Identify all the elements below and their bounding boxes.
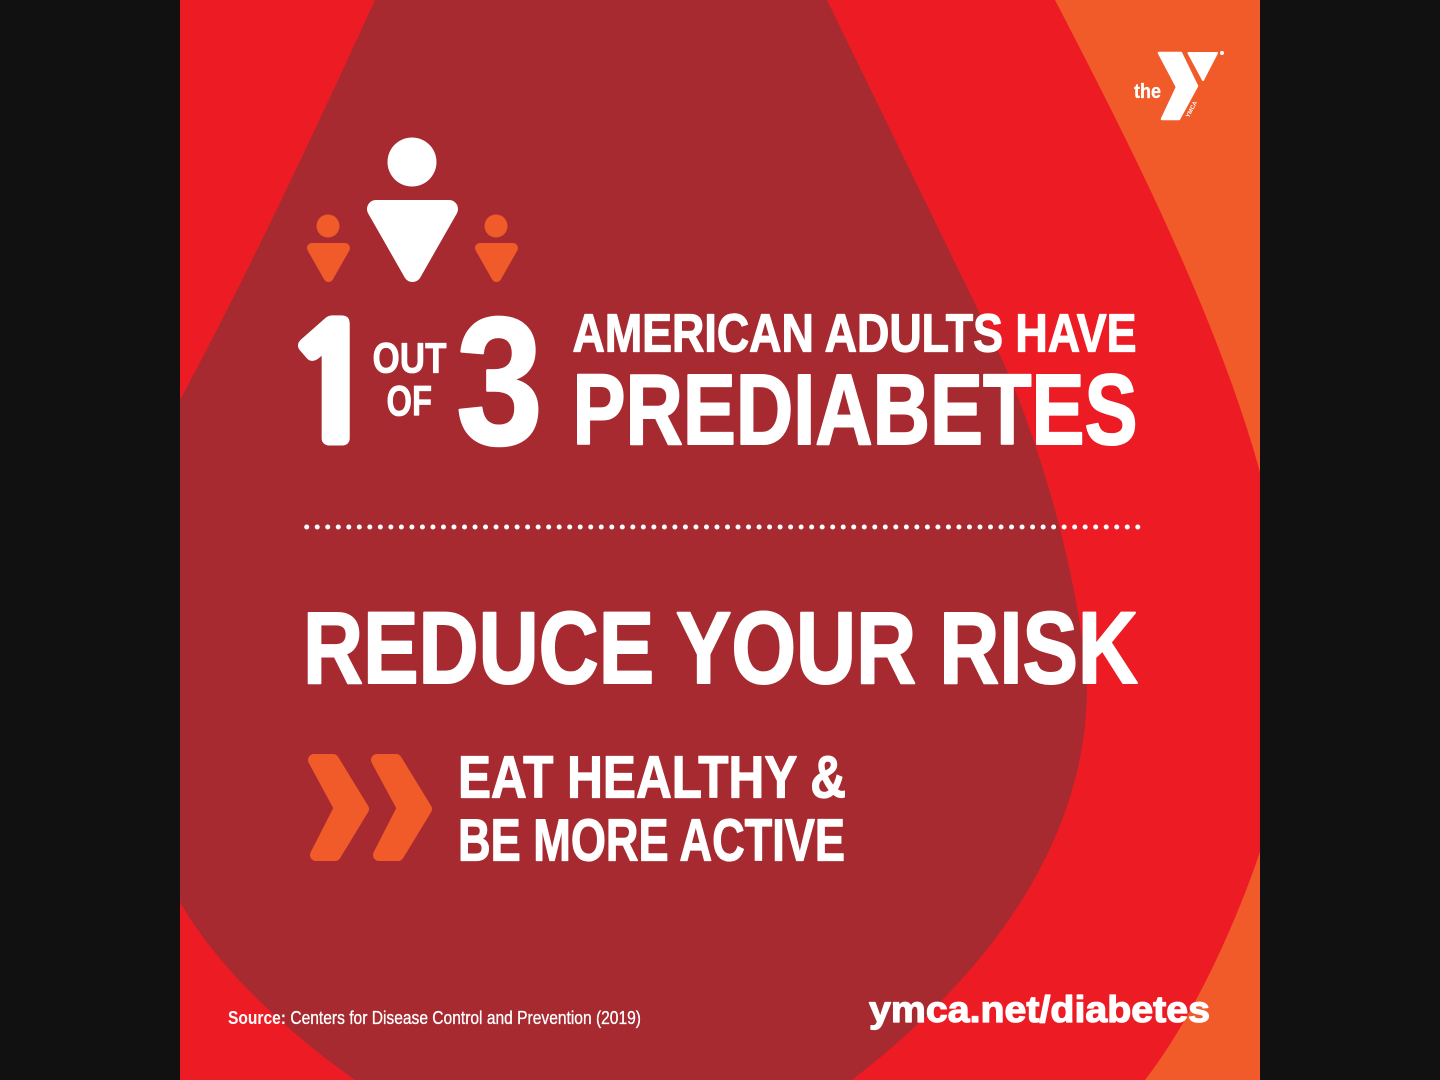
text line: eat healthy: EAT HEALTHY & [458, 744, 846, 810]
shape: dark red blood drop [180, 0, 1087, 1080]
logo mark: Y left arm and stem [1159, 53, 1197, 119]
icon: left orange person [312, 214, 345, 277]
text line: American adults have: AMERICAN ADULTS HAVE [572, 304, 1136, 363]
website url: ymca.net/diabetes [869, 989, 1210, 1030]
text line: prediabetes: PREDIABETES [572, 354, 1138, 466]
icon: double chevron arrow [314, 760, 426, 855]
heading: American adults have prediabetes [572, 304, 1138, 466]
logo mark: registered dot [1220, 51, 1224, 55]
numeral: 1: 1 [282, 307, 382, 464]
icon: first chevron [314, 760, 363, 855]
icon: one out of three people [312, 138, 513, 277]
shape: top right orange curve [1055, 0, 1260, 472]
logo word: the: the [1134, 81, 1161, 103]
label: out: OUT [372, 336, 447, 383]
panel: red square [180, 0, 1260, 1080]
logo small text: YMCA: YMCA [1185, 100, 1199, 119]
icon: second chevron [377, 760, 426, 855]
logo mark: Y right arm [1188, 53, 1217, 80]
icon: centre white person [376, 138, 449, 273]
text block: eat healthy and be more active [458, 744, 846, 873]
statistic: 1 out of 3 [282, 279, 543, 483]
numeral: 3: 3 [456, 279, 543, 483]
shape: bottom right orange curve [1145, 852, 1260, 1080]
label: of: OF [386, 379, 432, 426]
logo: the Y [1134, 51, 1224, 119]
text line: be more active: BE MORE ACTIVE [458, 807, 845, 873]
source note: Source: Centers for Disease Control and Prevention (2019) [228, 1008, 641, 1028]
icon: right orange person [480, 214, 513, 277]
heading: reduce your risk: REDUCE YOUR RISK [303, 591, 1138, 705]
